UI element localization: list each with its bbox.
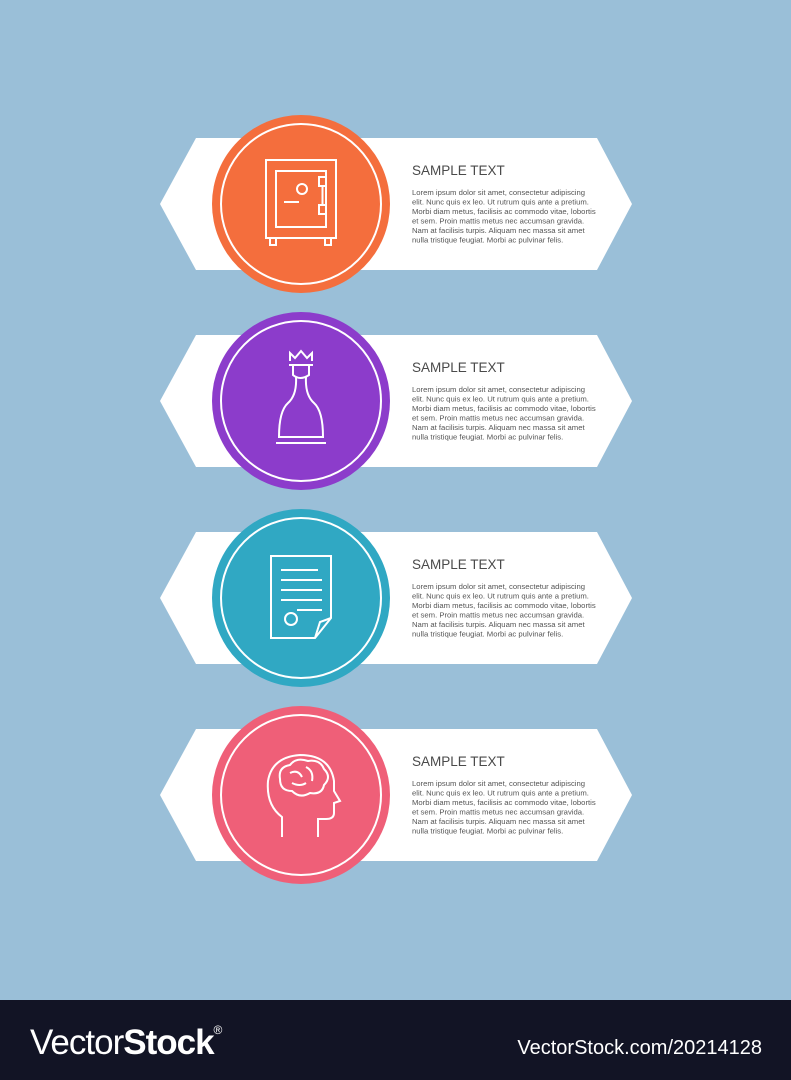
footer bar [0,1000,791,1080]
panel: item 1 safe [160,115,632,293]
banner 3 [160,532,632,664]
banner 1 [160,138,632,270]
footer logo: VectorStock [30,1023,214,1062]
banner 2 [160,335,632,467]
text block 4 [412,779,596,836]
banner 4 [160,729,632,861]
panel: item 4 brain [160,706,632,884]
circle 2 [212,312,390,490]
footer logo: ® [214,1023,223,1037]
heading 1: SAMPLE TEXT [412,163,505,178]
heading 3: SAMPLE TEXT [412,557,505,572]
circle 1 [212,115,390,293]
circle 4 [212,706,390,884]
heading 4: SAMPLE TEXT [412,754,505,769]
text block 3 [412,582,596,638]
icon: document [271,556,331,638]
icon: safe [266,160,336,245]
circle 3 [212,509,390,687]
text block 1 [412,188,596,244]
heading 2: SAMPLE TEXT [412,360,505,375]
text block 2 [412,385,596,442]
panel: item 2 chess [160,312,632,490]
icon: chess queen [276,351,326,443]
panel: item 3 document [160,509,632,687]
icon: head with brain [268,755,340,837]
footer url: VectorStock.com/20214128 [517,1037,762,1059]
